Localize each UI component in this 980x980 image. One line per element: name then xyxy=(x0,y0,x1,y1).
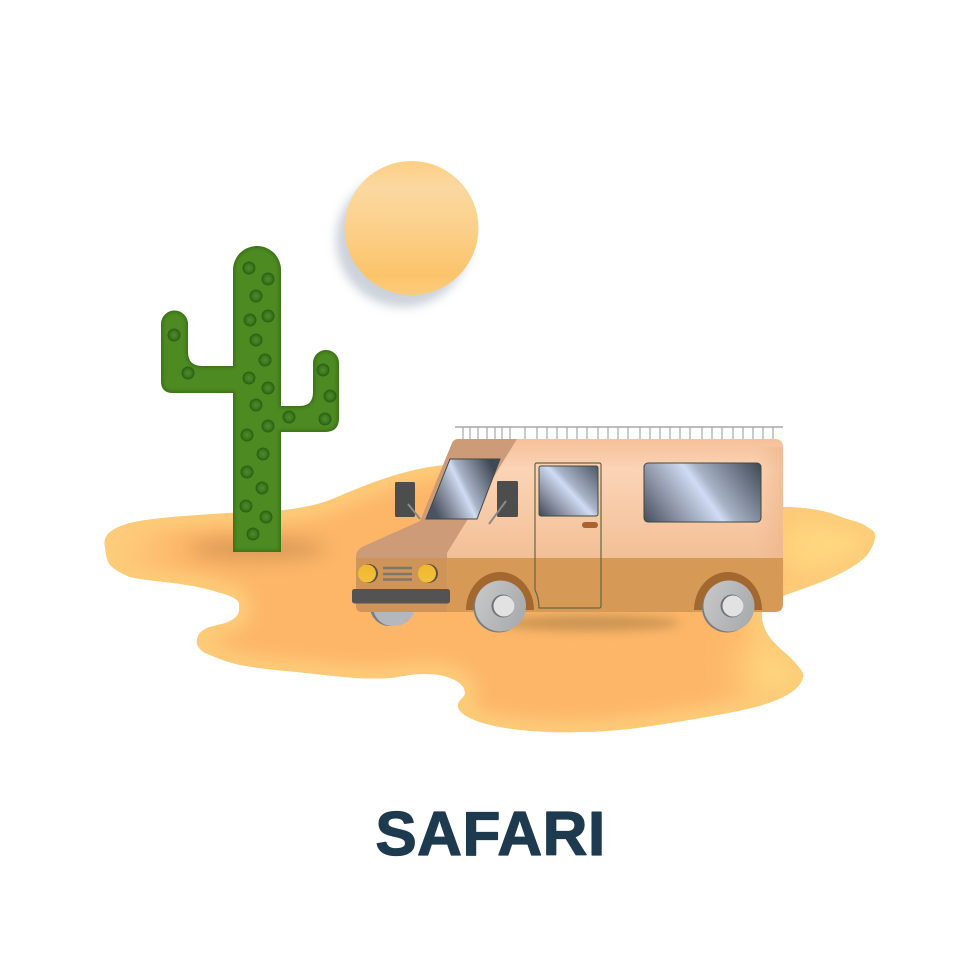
cactus xyxy=(161,246,339,552)
mirror left xyxy=(395,482,415,517)
van xyxy=(352,427,783,632)
far front wheel xyxy=(370,610,415,626)
van shadow xyxy=(500,615,680,631)
door window xyxy=(539,466,598,516)
sun xyxy=(336,161,478,307)
cab xyxy=(356,439,517,558)
windscreen xyxy=(426,459,500,519)
front wheel xyxy=(474,580,526,632)
wipers xyxy=(408,501,506,524)
headlights xyxy=(358,564,438,583)
lower body xyxy=(447,558,783,612)
sand ground xyxy=(104,465,876,732)
upper body xyxy=(447,439,783,560)
door xyxy=(535,463,601,608)
door handle xyxy=(582,522,598,528)
side window xyxy=(644,463,761,522)
cactus spots xyxy=(168,262,336,540)
title: SAFARI xyxy=(375,800,606,869)
wheel arches xyxy=(466,572,762,610)
mirror right xyxy=(497,481,518,517)
rear wheel xyxy=(702,580,754,632)
bumper xyxy=(352,589,450,604)
cactus shadow xyxy=(190,538,326,560)
roof rack xyxy=(455,427,783,440)
grille xyxy=(383,568,412,580)
cab lower xyxy=(356,558,447,612)
body edge shading xyxy=(755,447,783,558)
